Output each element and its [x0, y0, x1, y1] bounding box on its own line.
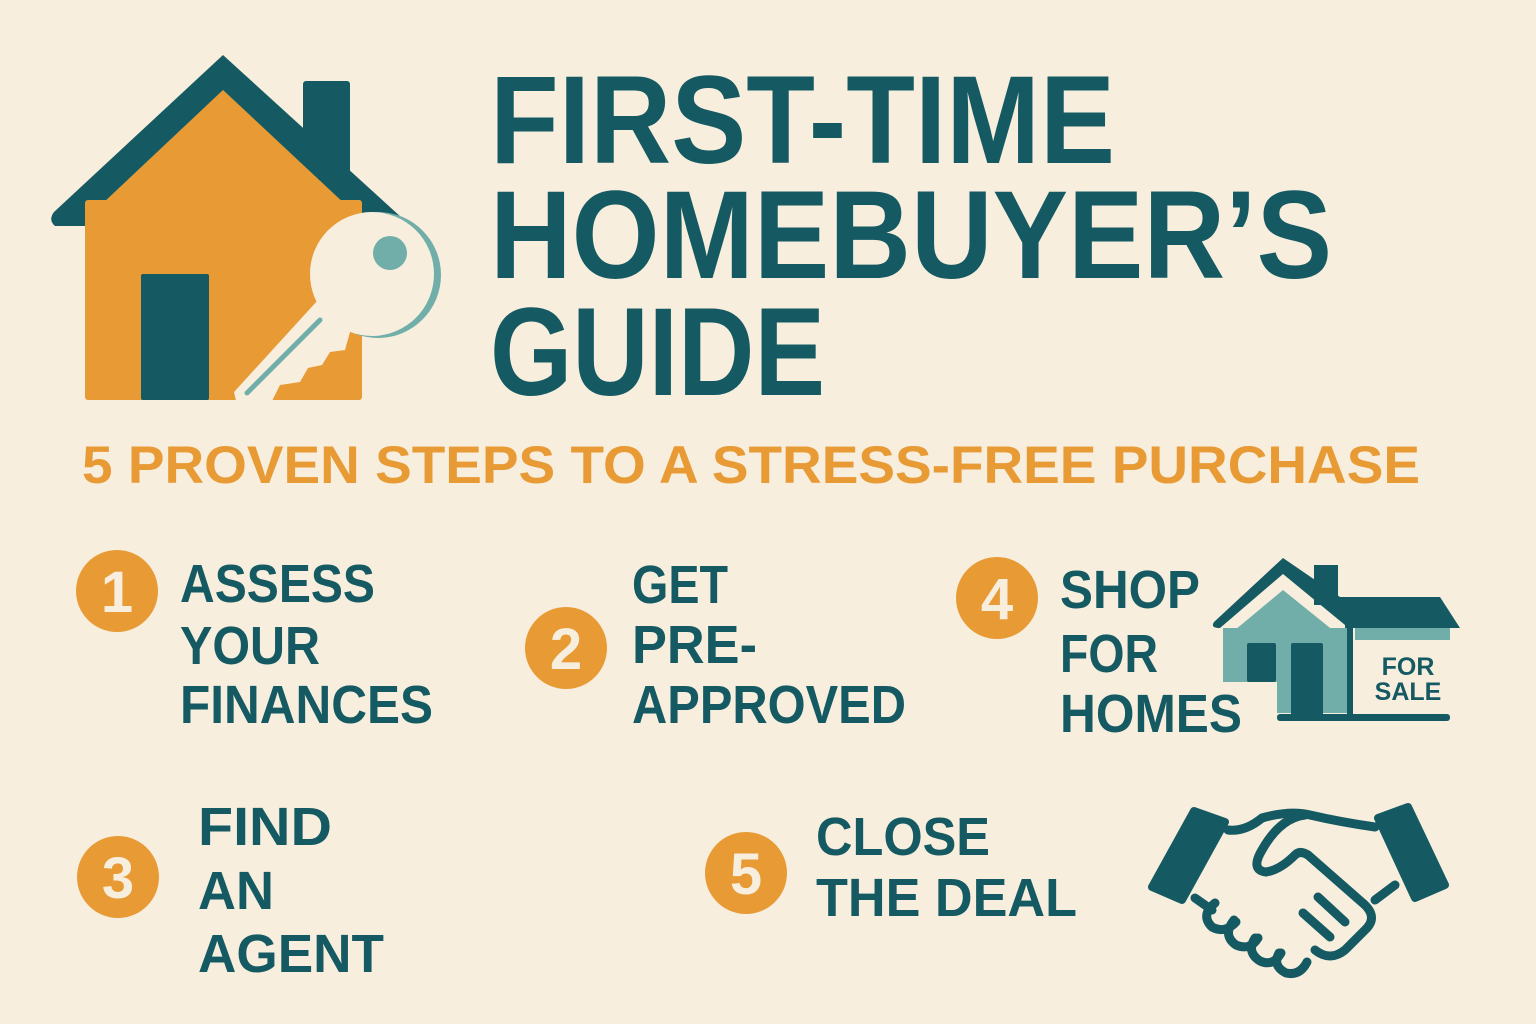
step 1: 1: [101, 560, 133, 625]
title: FIRST-TIME: [490, 51, 1115, 190]
subtitle: 5 PROVEN STEPS TO A STRESS-FREE PURCHASE: [82, 436, 1420, 495]
step 3: AGENT: [198, 924, 384, 984]
step 4: 4: [981, 567, 1013, 632]
step 1: ASSESS: [180, 554, 375, 614]
icon: house with key: [51, 55, 441, 405]
step 3: FIND: [198, 797, 332, 857]
step 3: 3: [102, 846, 134, 911]
step 1: YOUR: [180, 616, 320, 676]
icon: for sale house: SALE: [1375, 678, 1441, 706]
icon: for sale house: FOR: [1382, 653, 1434, 681]
title: [490, 51, 1332, 422]
step 2: GET: [632, 555, 728, 615]
step 5: CLOSE: [816, 807, 990, 867]
step 1: [76, 550, 433, 735]
step 5: [705, 807, 1077, 928]
step 1: FINANCES: [180, 675, 433, 735]
step 4: FOR: [1060, 624, 1158, 684]
icon: for sale house: [1213, 558, 1460, 721]
step 2: 2: [550, 617, 582, 682]
step 2: [525, 555, 906, 735]
icon: handshake: [1152, 807, 1445, 974]
step 4: [956, 557, 1242, 744]
step 4: SHOP: [1060, 560, 1200, 620]
step 3: [77, 797, 384, 984]
step 2: APPROVED: [632, 675, 906, 735]
step 3: AN: [198, 861, 274, 921]
title: GUIDE: [490, 283, 825, 422]
title: HOMEBUYER’S: [490, 166, 1332, 305]
step 5: THE DEAL: [816, 868, 1077, 928]
step 4: HOMES: [1060, 684, 1242, 744]
step 2: PRE-: [632, 615, 757, 675]
step 5: 5: [730, 842, 762, 907]
